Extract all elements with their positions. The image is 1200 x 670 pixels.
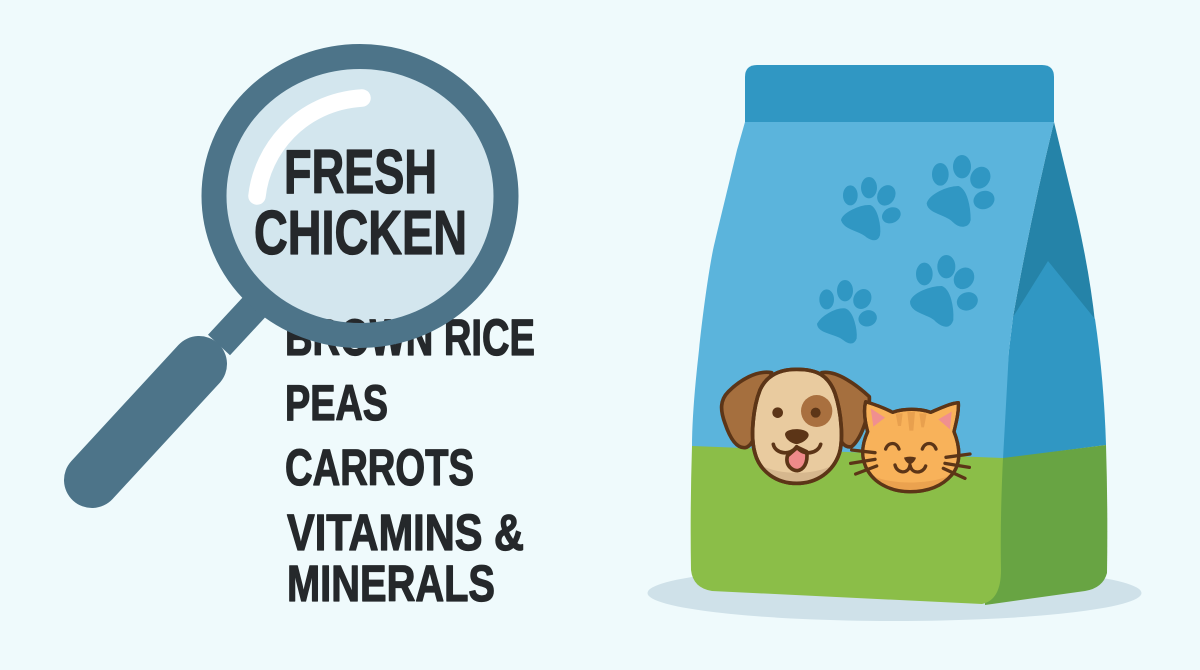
paw print 2 <box>927 156 996 226</box>
cat head <box>863 402 959 492</box>
cat head outline <box>863 402 959 492</box>
bag side green <box>985 445 1107 605</box>
dog eyes <box>772 407 821 418</box>
cat ears inner <box>871 408 952 429</box>
bag side gusset lower <box>1000 261 1106 459</box>
magnified ingredient: fresh chicken: CHICKEN <box>254 199 467 268</box>
cat eyes <box>886 443 936 449</box>
dog chin shade <box>764 466 830 482</box>
cat face <box>851 402 970 497</box>
paw print 1 <box>842 178 902 240</box>
ingredient: brown rice: BROWN RICE <box>285 309 535 366</box>
magnifier lens <box>224 67 496 325</box>
ingredient list: MINERALS <box>287 555 495 612</box>
cat chin shade <box>875 476 948 490</box>
magnified ingredient: fresh chicken: FRESH <box>284 138 437 207</box>
ingredient list: CARROTS <box>285 439 474 496</box>
dog face <box>722 369 869 490</box>
cat stripes <box>896 412 927 431</box>
paw print 4 <box>818 281 878 343</box>
bag front green panel <box>691 446 1003 604</box>
lens highlight <box>257 98 362 196</box>
dog head <box>753 369 841 483</box>
cat mouth <box>895 465 926 472</box>
paw print 3 <box>911 256 980 326</box>
magnifying glass handle <box>92 290 270 480</box>
ingredient list: VITAMINS & <box>287 504 524 561</box>
cat whiskers <box>851 450 970 478</box>
cat nose <box>904 457 916 465</box>
dog tongue <box>787 447 807 471</box>
dog left ear <box>722 372 772 448</box>
pet food bag <box>691 65 1107 605</box>
infographic canvas <box>64 44 1142 621</box>
bag side gusset upper <box>1013 122 1095 322</box>
dog right ear <box>822 372 869 447</box>
bag front blue panel <box>692 122 1054 459</box>
dog head outline <box>753 369 841 483</box>
ingredient list <box>285 375 524 612</box>
magnifier ring <box>214 56 506 336</box>
bag top flap <box>745 65 1054 122</box>
paw prints <box>818 156 996 343</box>
dog mouth <box>773 444 821 453</box>
magnified ingredient: fresh chicken <box>254 138 467 268</box>
bag ground shadow <box>648 565 1142 621</box>
dog nose <box>785 429 809 444</box>
ingredient list: PEAS <box>285 375 388 431</box>
dog eye patch <box>801 395 832 427</box>
